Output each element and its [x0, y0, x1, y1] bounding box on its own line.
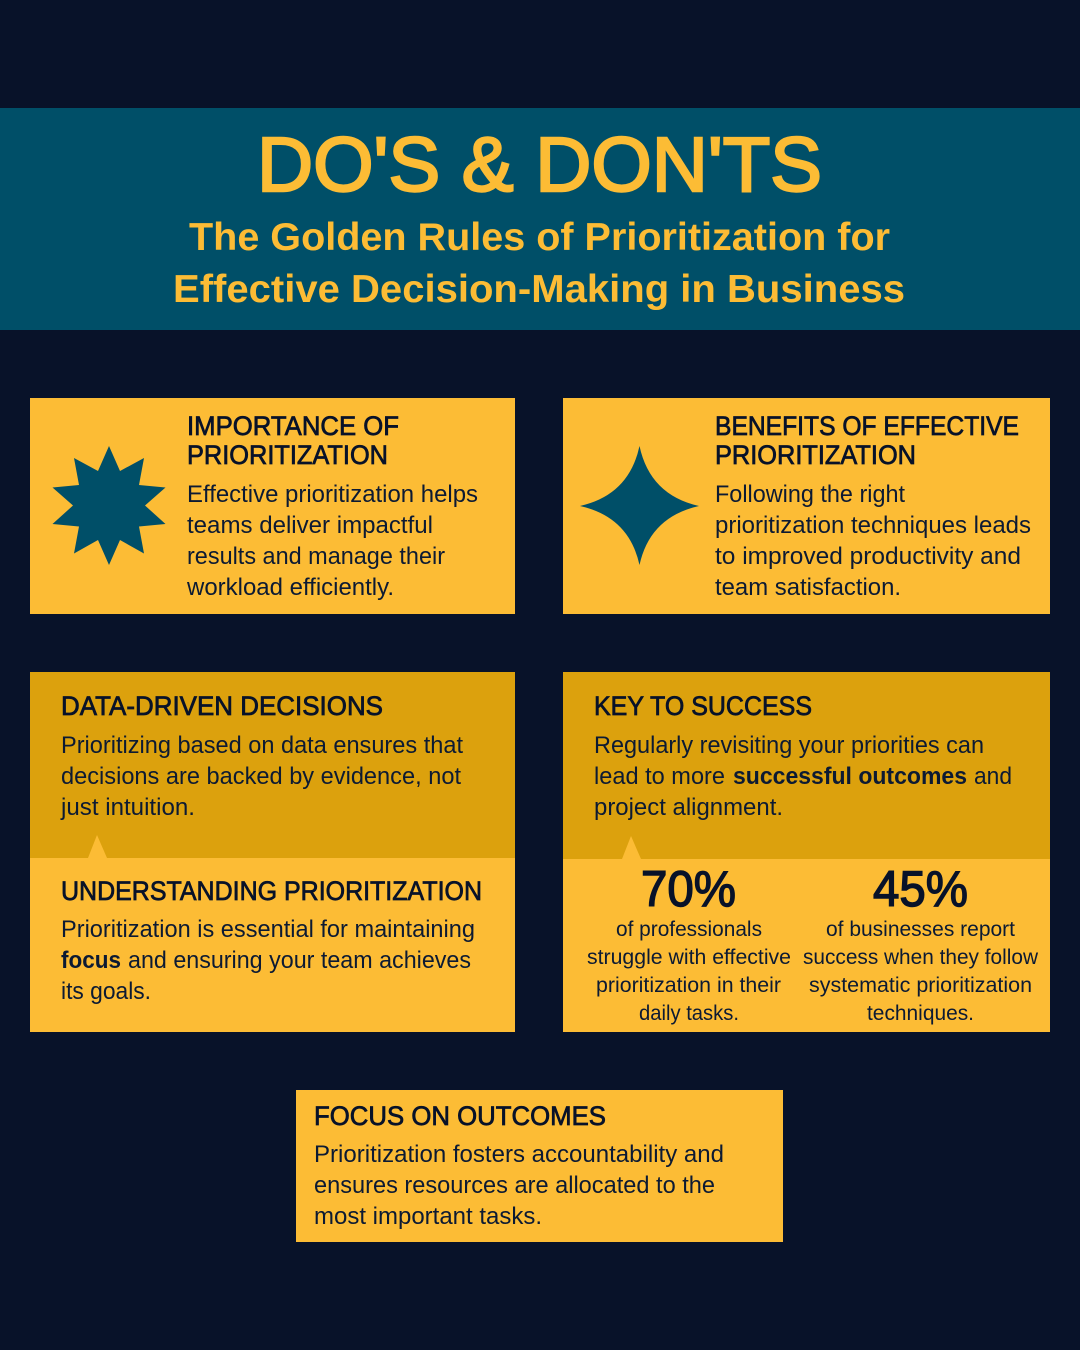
body text — [61, 916, 475, 1005]
statistic description: systematic prioritization — [809, 974, 1032, 997]
heading: PRIORITIZATION — [187, 440, 388, 470]
statistic description: success when they follow — [803, 946, 1039, 969]
body text: Prioritization fosters accountability and — [314, 1141, 724, 1168]
panel: benefits of effective prioritization — [563, 398, 1050, 614]
heading: DATA-DRIVEN DECISIONS — [61, 691, 383, 721]
body text: Regularly revisiting your priorities can — [594, 732, 984, 759]
subtitle: Effective Decision-Making in Business — [173, 268, 905, 311]
icon: ten-point star — [52, 446, 166, 565]
body text — [715, 481, 1031, 601]
body text: Prioritizing based on data ensures that — [61, 732, 463, 759]
title: DO'S & DON'TS — [257, 122, 822, 208]
body text — [594, 732, 1012, 821]
statistic: 45 percent: 45% — [873, 861, 968, 917]
statistic: 70 percent — [587, 861, 791, 1025]
panel: focus on outcomes — [296, 1090, 783, 1242]
body text: ensures resources are allocated to the — [314, 1172, 715, 1199]
statistic description: struggle with effective — [587, 946, 791, 969]
heading: UNDERSTANDING PRIORITIZATION — [61, 876, 482, 906]
heading: IMPORTANCE OF — [187, 411, 399, 441]
body text: most important tasks. — [314, 1203, 542, 1230]
body text: and — [974, 763, 1012, 790]
icon: four-point sparkle — [580, 446, 699, 565]
panel: data-driven decisions — [30, 672, 515, 858]
body text: successful outcomes — [733, 763, 967, 790]
statistic: 45 percent — [803, 861, 1039, 1025]
header banner — [0, 108, 1080, 330]
statistic description: prioritization in their — [596, 974, 781, 997]
body text: decisions are backed by evidence, not — [61, 763, 461, 790]
body text — [60, 732, 463, 821]
statistic description: of professionals — [616, 918, 762, 941]
body text: just intuition. — [60, 794, 195, 821]
panel: understanding prioritization — [30, 835, 515, 1032]
statistic description: techniques. — [867, 1002, 974, 1025]
panel: key to success — [563, 672, 1050, 859]
panel: importance of prioritization — [30, 398, 515, 614]
body text: Effective prioritization helps — [187, 481, 478, 508]
subtitle: The Golden Rules of Prioritization for — [189, 216, 890, 259]
heading: KEY TO SUCCESS — [594, 691, 812, 721]
heading: FOCUS ON OUTCOMES — [314, 1101, 606, 1131]
body text: workload efficiently. — [186, 574, 394, 601]
body text: focus — [61, 947, 121, 974]
body text: and ensuring your team achieves — [128, 947, 471, 974]
heading: BENEFITS OF EFFECTIVE — [715, 411, 1019, 441]
statistic description — [803, 918, 1039, 1025]
body text: teams deliver impactful — [187, 512, 433, 539]
body text: team satisfaction. — [715, 574, 901, 601]
heading: PRIORITIZATION — [715, 440, 916, 470]
statistic description: daily tasks. — [639, 1002, 739, 1025]
heading — [187, 411, 399, 470]
statistic description — [587, 918, 791, 1025]
statistic description: of businesses report — [826, 918, 1015, 941]
heading — [715, 411, 1019, 470]
body text: Prioritization is essential for maintaining — [61, 916, 475, 943]
body text: to improved productivity and — [715, 543, 1021, 570]
body text: lead to more — [594, 763, 725, 790]
body text: project alignment. — [594, 794, 783, 821]
body text: prioritization techniques leads — [715, 512, 1031, 539]
body text — [186, 481, 478, 601]
panel: statistics — [563, 836, 1050, 1032]
subtitle — [173, 216, 905, 311]
body text: results and manage their — [187, 543, 445, 570]
pointer triangle — [622, 836, 641, 859]
pointer triangle — [88, 835, 107, 858]
body text: Following the right — [715, 481, 905, 508]
body text — [314, 1141, 724, 1230]
statistic: 70 percent: 70% — [641, 861, 736, 917]
body text: its goals. — [61, 978, 151, 1005]
